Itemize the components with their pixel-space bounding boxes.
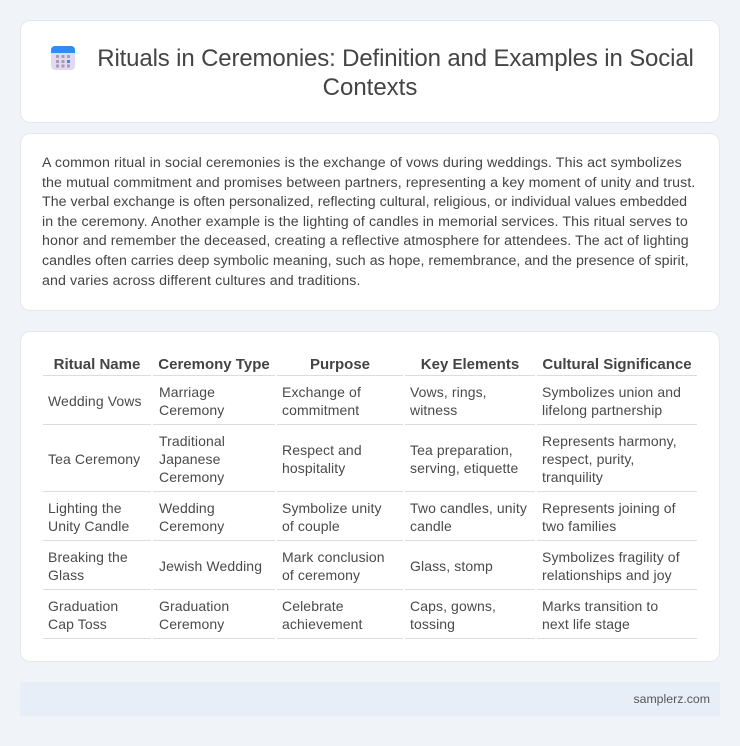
row: breaking the glass: Mark conclusion: [282, 549, 385, 565]
row: wedding vows: Wedding Vows: [48, 393, 142, 409]
row: unity candle: Symbolize unity: [282, 500, 382, 516]
row: graduation cap toss: Marks transition to: [542, 598, 658, 614]
table: [43, 356, 697, 639]
panel: table: [20, 331, 720, 662]
row: tea ceremony: Respect and: [282, 442, 362, 458]
row: unity candle: Unity Candle: [48, 518, 129, 534]
header row: Cultural Significance: [542, 356, 692, 373]
row: unity candle: Represents joining of: [542, 500, 676, 516]
row: graduation cap toss: Ceremony: [159, 616, 224, 632]
row: unity candle: [43, 500, 697, 541]
header card: [20, 20, 720, 123]
icon: calendar: [51, 46, 75, 70]
footer bar: [20, 682, 720, 716]
row: graduation cap toss: Caps, gowns,: [410, 598, 496, 614]
description text: the mutual commitment and promises between partners, representing a key moment of unity and trust.: [42, 175, 695, 191]
row: wedding vows: Marriage: [159, 384, 215, 400]
row: breaking the glass: Glass: [48, 567, 84, 583]
row: unity candle: of couple: [282, 518, 340, 534]
row: tea ceremony: respect, purity,: [542, 451, 634, 467]
panel: description: [20, 133, 720, 311]
row: graduation cap toss: Cap Toss: [48, 616, 107, 632]
row: breaking the glass: relationships and joy: [542, 567, 672, 583]
row: breaking the glass: [43, 549, 697, 590]
row: tea ceremony: Represents harmony,: [542, 433, 677, 449]
title: Rituals in Ceremonies: Definition and Examples in Social: [97, 45, 694, 72]
row: tea ceremony: Tea preparation,: [410, 442, 513, 458]
row: tea ceremony: tranquility: [542, 469, 603, 485]
row: unity candle: Wedding: [159, 500, 215, 516]
row: graduation cap toss: achievement: [282, 616, 362, 632]
row: graduation cap toss: Graduation: [48, 598, 118, 614]
row: wedding vows: commitment: [282, 402, 359, 418]
footer text: samplerz.com: [633, 692, 710, 706]
header row: [43, 356, 697, 376]
row: tea ceremony: Traditional: [159, 433, 225, 449]
row: breaking the glass: Glass, stomp: [410, 558, 493, 574]
row: wedding vows: [43, 384, 697, 425]
row: unity candle: Ceremony: [159, 518, 224, 534]
row: breaking the glass: Breaking the: [48, 549, 128, 565]
row: tea ceremony: Tea Ceremony: [48, 451, 140, 467]
description text: A common ritual in social ceremonies is the exchange of vows during weddings. This act symbolizes: [42, 155, 682, 171]
row: wedding vows: lifelong partnership: [542, 402, 662, 418]
row: graduation cap toss: next life stage: [542, 616, 630, 632]
row: graduation cap toss: Graduation: [159, 598, 229, 614]
row: unity candle: two families: [542, 518, 616, 534]
row: tea ceremony: hospitality: [282, 460, 345, 476]
description text: and varies across different cultures and traditions.: [42, 273, 361, 289]
row: wedding vows: Exchange of: [282, 384, 361, 400]
row: breaking the glass: of ceremony: [282, 567, 360, 583]
row: unity candle: Two candles, unity: [410, 500, 527, 516]
row: wedding vows: Ceremony: [159, 402, 224, 418]
row: wedding vows: witness: [410, 402, 457, 418]
row: wedding vows: Vows, rings,: [410, 384, 487, 400]
row: graduation cap toss: tossing: [410, 616, 455, 632]
description text: The verbal exchange is often personalized, reflecting cultural, religious, or individual values embedded: [42, 194, 687, 210]
row: breaking the glass: Symbolizes fragility of: [542, 549, 680, 565]
row: breaking the glass: Jewish Wedding: [159, 558, 262, 574]
header row: Key Elements: [421, 356, 519, 373]
description text: in the ceremony. Another example is the lighting of candles in memorial services. This ritual serves to: [42, 214, 688, 230]
row: tea ceremony: Ceremony: [159, 469, 224, 485]
row: tea ceremony: Japanese: [159, 451, 221, 467]
description text: honor and remember the deceased, creating a reflective atmosphere for attendees. The act of lighting: [42, 233, 689, 249]
row: tea ceremony: serving, etiquette: [410, 460, 518, 476]
header row: Ceremony Type: [158, 356, 270, 373]
header row: Ritual Name: [54, 356, 140, 373]
row: graduation cap toss: Celebrate: [282, 598, 344, 614]
title: Contexts: [323, 74, 417, 101]
row: unity candle: candle: [410, 518, 452, 534]
title: [97, 45, 694, 101]
row: unity candle: Lighting the: [48, 500, 122, 516]
description text: candles often carries deep symbolic meaning, such as hope, remembrance, and the presence of spirit,: [42, 253, 689, 269]
row: tea ceremony: [43, 433, 697, 492]
description text: [42, 155, 695, 289]
header row: Purpose: [310, 356, 370, 373]
row: wedding vows: Symbolizes union and: [542, 384, 681, 400]
